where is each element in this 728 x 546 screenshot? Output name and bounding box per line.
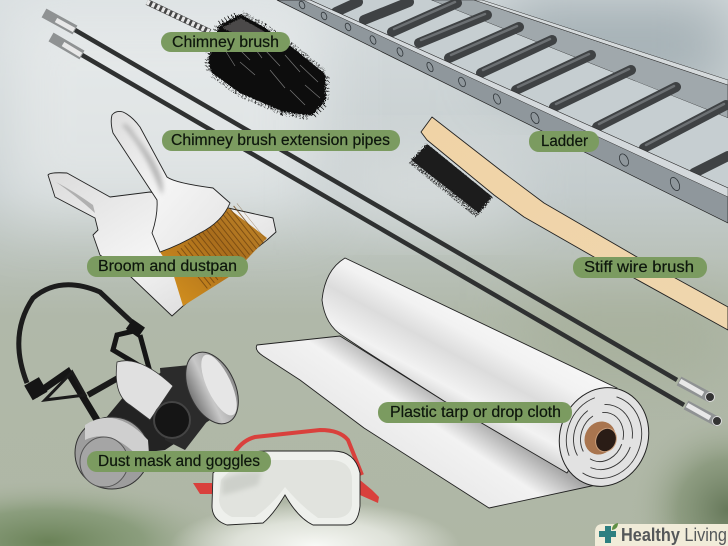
label: ladder xyxy=(529,131,599,152)
label: stiff wire brush: Stiff wire brush xyxy=(584,259,694,276)
label: ladder: Ladder xyxy=(541,133,588,150)
label: plastic tarp or drop cloth: Plastic tarp or drop cloth xyxy=(390,404,561,421)
icon: chimney brush extension pipes xyxy=(44,13,722,426)
icon: plastic tarp roll xyxy=(256,258,662,508)
icon: stiff wire brush xyxy=(412,117,728,330)
icon: ladder xyxy=(277,0,728,223)
label: chimney brush xyxy=(161,32,290,52)
label: broom and dustpan xyxy=(87,256,248,277)
icon: broom and dustpan xyxy=(48,111,276,316)
label: chimney brush: Chimney brush xyxy=(172,34,279,51)
label: stiff wire brush xyxy=(573,257,707,278)
label: plastic tarp or drop cloth xyxy=(378,402,572,423)
icon: chimney brush xyxy=(147,2,322,112)
label: dust mask and goggles: Dust mask and goggles xyxy=(98,453,260,470)
icon: dust mask xyxy=(19,285,249,489)
label: chimney brush extension pipes: Chimney brush extension pipes xyxy=(171,132,390,149)
label: broom and dustpan: Broom and dustpan xyxy=(98,258,237,275)
icon: goggles xyxy=(193,430,379,525)
